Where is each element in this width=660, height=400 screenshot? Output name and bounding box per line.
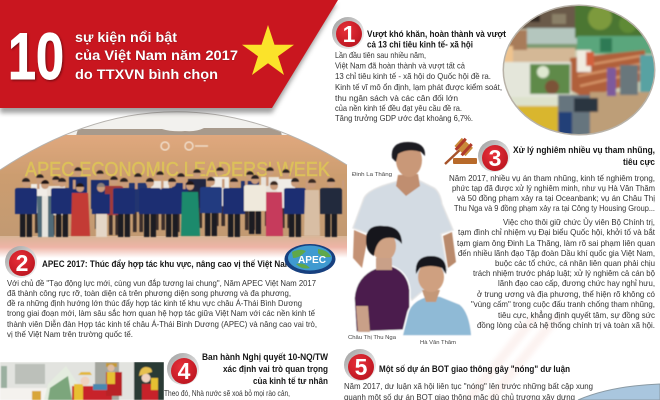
heading 4: của kinh tế tư nhân xyxy=(253,376,328,387)
body 3: tiêu cực, khẳng định quyết tâm, sự đồng sức xyxy=(498,309,655,320)
backdrop wall xyxy=(0,135,347,237)
APEC logo: APEC xyxy=(298,255,326,266)
body 5: Năm 2017, dư luận xã hội liên tục "nóng" lên trước những bất cập xung xyxy=(344,381,593,391)
heading 5: Một số dự án BOT giao thông gây "nóng" dư luận xyxy=(379,364,570,375)
badge 4 xyxy=(167,353,199,385)
badge 5 xyxy=(344,349,376,381)
big number 10: 10 xyxy=(8,19,64,93)
heading 4 xyxy=(202,352,329,387)
body 2: đã thành công rực rỡ, toàn diện cả trên phương diện song phương và đa phương, xyxy=(7,288,291,298)
heading 1 xyxy=(367,29,507,50)
portrait: Đinh La Thăng xyxy=(353,142,456,300)
name labels xyxy=(348,172,456,346)
heading 1: Vượt khó khăn, hoàn thành và vượt xyxy=(367,29,507,40)
red title banner xyxy=(0,0,338,113)
floor xyxy=(0,236,347,258)
badge 5: 5 xyxy=(355,354,368,380)
body 5 xyxy=(344,381,593,400)
body 3: tạm giam ông Đinh La Thăng, làm rõ sai phạm liên quan xyxy=(457,238,655,248)
body 1: Lần đầu tiên sau nhiều năm, xyxy=(335,50,426,60)
body 1: Kinh tế vĩ mô ổn định, lạm phát được kiểm soát, xyxy=(335,82,502,92)
backdrop logos xyxy=(161,142,208,150)
portrait: Châu Thị Thu Nga xyxy=(354,226,410,332)
badge 3 xyxy=(478,140,510,172)
badge 1 xyxy=(332,17,364,49)
title text: sự kiện nổi bật xyxy=(75,30,178,45)
title text: do TTXVN bình chọn xyxy=(75,67,218,82)
badge 4: 4 xyxy=(178,358,191,384)
heading 4: xác định vai trò quan trọng xyxy=(223,364,328,375)
badge 2: 2 xyxy=(16,250,28,276)
body 3: tạm đình chỉ nhiệm vụ Đại biểu Quốc hội, khởi tố và bắt xyxy=(458,227,656,237)
portrait: Hà Văn Thăm xyxy=(402,256,472,336)
body 3: đồng lòng của cả hệ thống chính trị và toàn xã hội. xyxy=(477,320,655,330)
name labels: Châu Thị Thu Nga xyxy=(348,335,396,341)
body 1: của nền kinh tế đều đạt yêu cầu đề ra. xyxy=(335,103,462,113)
heading 3: tiêu cực xyxy=(623,157,656,168)
name labels: Hà Văn Thăm xyxy=(420,340,456,346)
body 2: vị thế Việt Nam trên trường quốc tế. xyxy=(7,329,133,339)
front row xyxy=(15,175,345,237)
leaders group xyxy=(15,167,345,237)
panel: APEC group photo xyxy=(0,100,347,260)
icon: yellow star xyxy=(242,25,294,75)
body 1 xyxy=(335,50,502,123)
badge 3: 3 xyxy=(489,145,501,171)
body 2: thành viên Diễn đàn Hợp tác kinh tế châu Á-Thái Bình Dương (APEC) và nâng cao vai trò, xyxy=(7,319,317,329)
body 4: Theo đó, Nhà nước sẽ xoá bỏ mọi rào cản, xyxy=(164,388,290,398)
body 1: 13 chỉ tiêu kinh tế - xã hội do Quốc hội đề ra. xyxy=(335,71,491,81)
event 4 photo xyxy=(0,362,164,400)
heading 3 xyxy=(513,145,656,168)
body 3 xyxy=(449,173,656,330)
panel: event 3 xyxy=(348,136,656,346)
panel: event 4 xyxy=(0,352,329,400)
badge 1: 1 xyxy=(343,21,356,47)
badge 2 xyxy=(5,246,37,278)
body 3: Năm 2017, nhiều vụ án tham nhũng, kinh tế nghiêm trọng, xyxy=(449,173,655,183)
panel: event 5 xyxy=(344,349,660,400)
body 2: đề ra những định hướng lớn thúc đẩy hợp tác kinh tế khu vực châu Á-Thái Bình Dương xyxy=(7,298,302,308)
panel: event 1 collage photo xyxy=(502,4,656,136)
title text: của Việt Nam năm 2017 xyxy=(75,48,238,63)
event 5 photo xyxy=(578,384,660,400)
body 1: Việt Nam đã hoàn thành và vượt tất cả xyxy=(335,60,465,70)
heading 4: Ban hành Nghị quyết 10-NQ/TW xyxy=(202,352,329,363)
back row xyxy=(31,167,295,235)
ceiling band xyxy=(76,128,282,135)
name labels: Đinh La Thăng xyxy=(352,172,392,178)
title text xyxy=(75,30,238,82)
body 1: Tăng trưởng GDP ước đạt khoảng 6,7%. xyxy=(335,113,473,123)
faint diagonal background stripes xyxy=(462,315,564,400)
icon: gavel xyxy=(445,136,477,164)
backdrop title: APEC ECONOMIC LEADERS' WEEK xyxy=(25,159,331,181)
body 2 xyxy=(7,278,317,339)
body 2: trong giai đoạn mới, làm sâu sắc hơn quan hệ hợp tác giữa Việt Nam với các nền kinh tế xyxy=(7,308,315,318)
APEC logo xyxy=(284,244,336,274)
heading 2: APEC 2017: Thúc đẩy hợp tác khu vực, nâng cao vị thế Việt Nam xyxy=(42,259,292,270)
body 3: ở trung ương và địa phương, thể hiện rõ không có xyxy=(477,289,655,299)
panel: event 1 text xyxy=(332,17,507,123)
heading 1: cả 13 chỉ tiêu kinh tế- xã hội xyxy=(367,40,473,50)
panel: event 2 text xyxy=(5,244,336,339)
body 2: Với chủ đề "Tạo động lực mới, cùng vun đắp tương lai chung", Năm APEC Việt Nam 2017 xyxy=(7,278,316,288)
body 3: và 50 đồng phạm xảy ra tại Oceanbank; vụ án Châu Thị xyxy=(457,193,655,203)
body 1: thu ngân sách và các cân đối lớn xyxy=(335,93,458,103)
portraits xyxy=(353,142,472,336)
